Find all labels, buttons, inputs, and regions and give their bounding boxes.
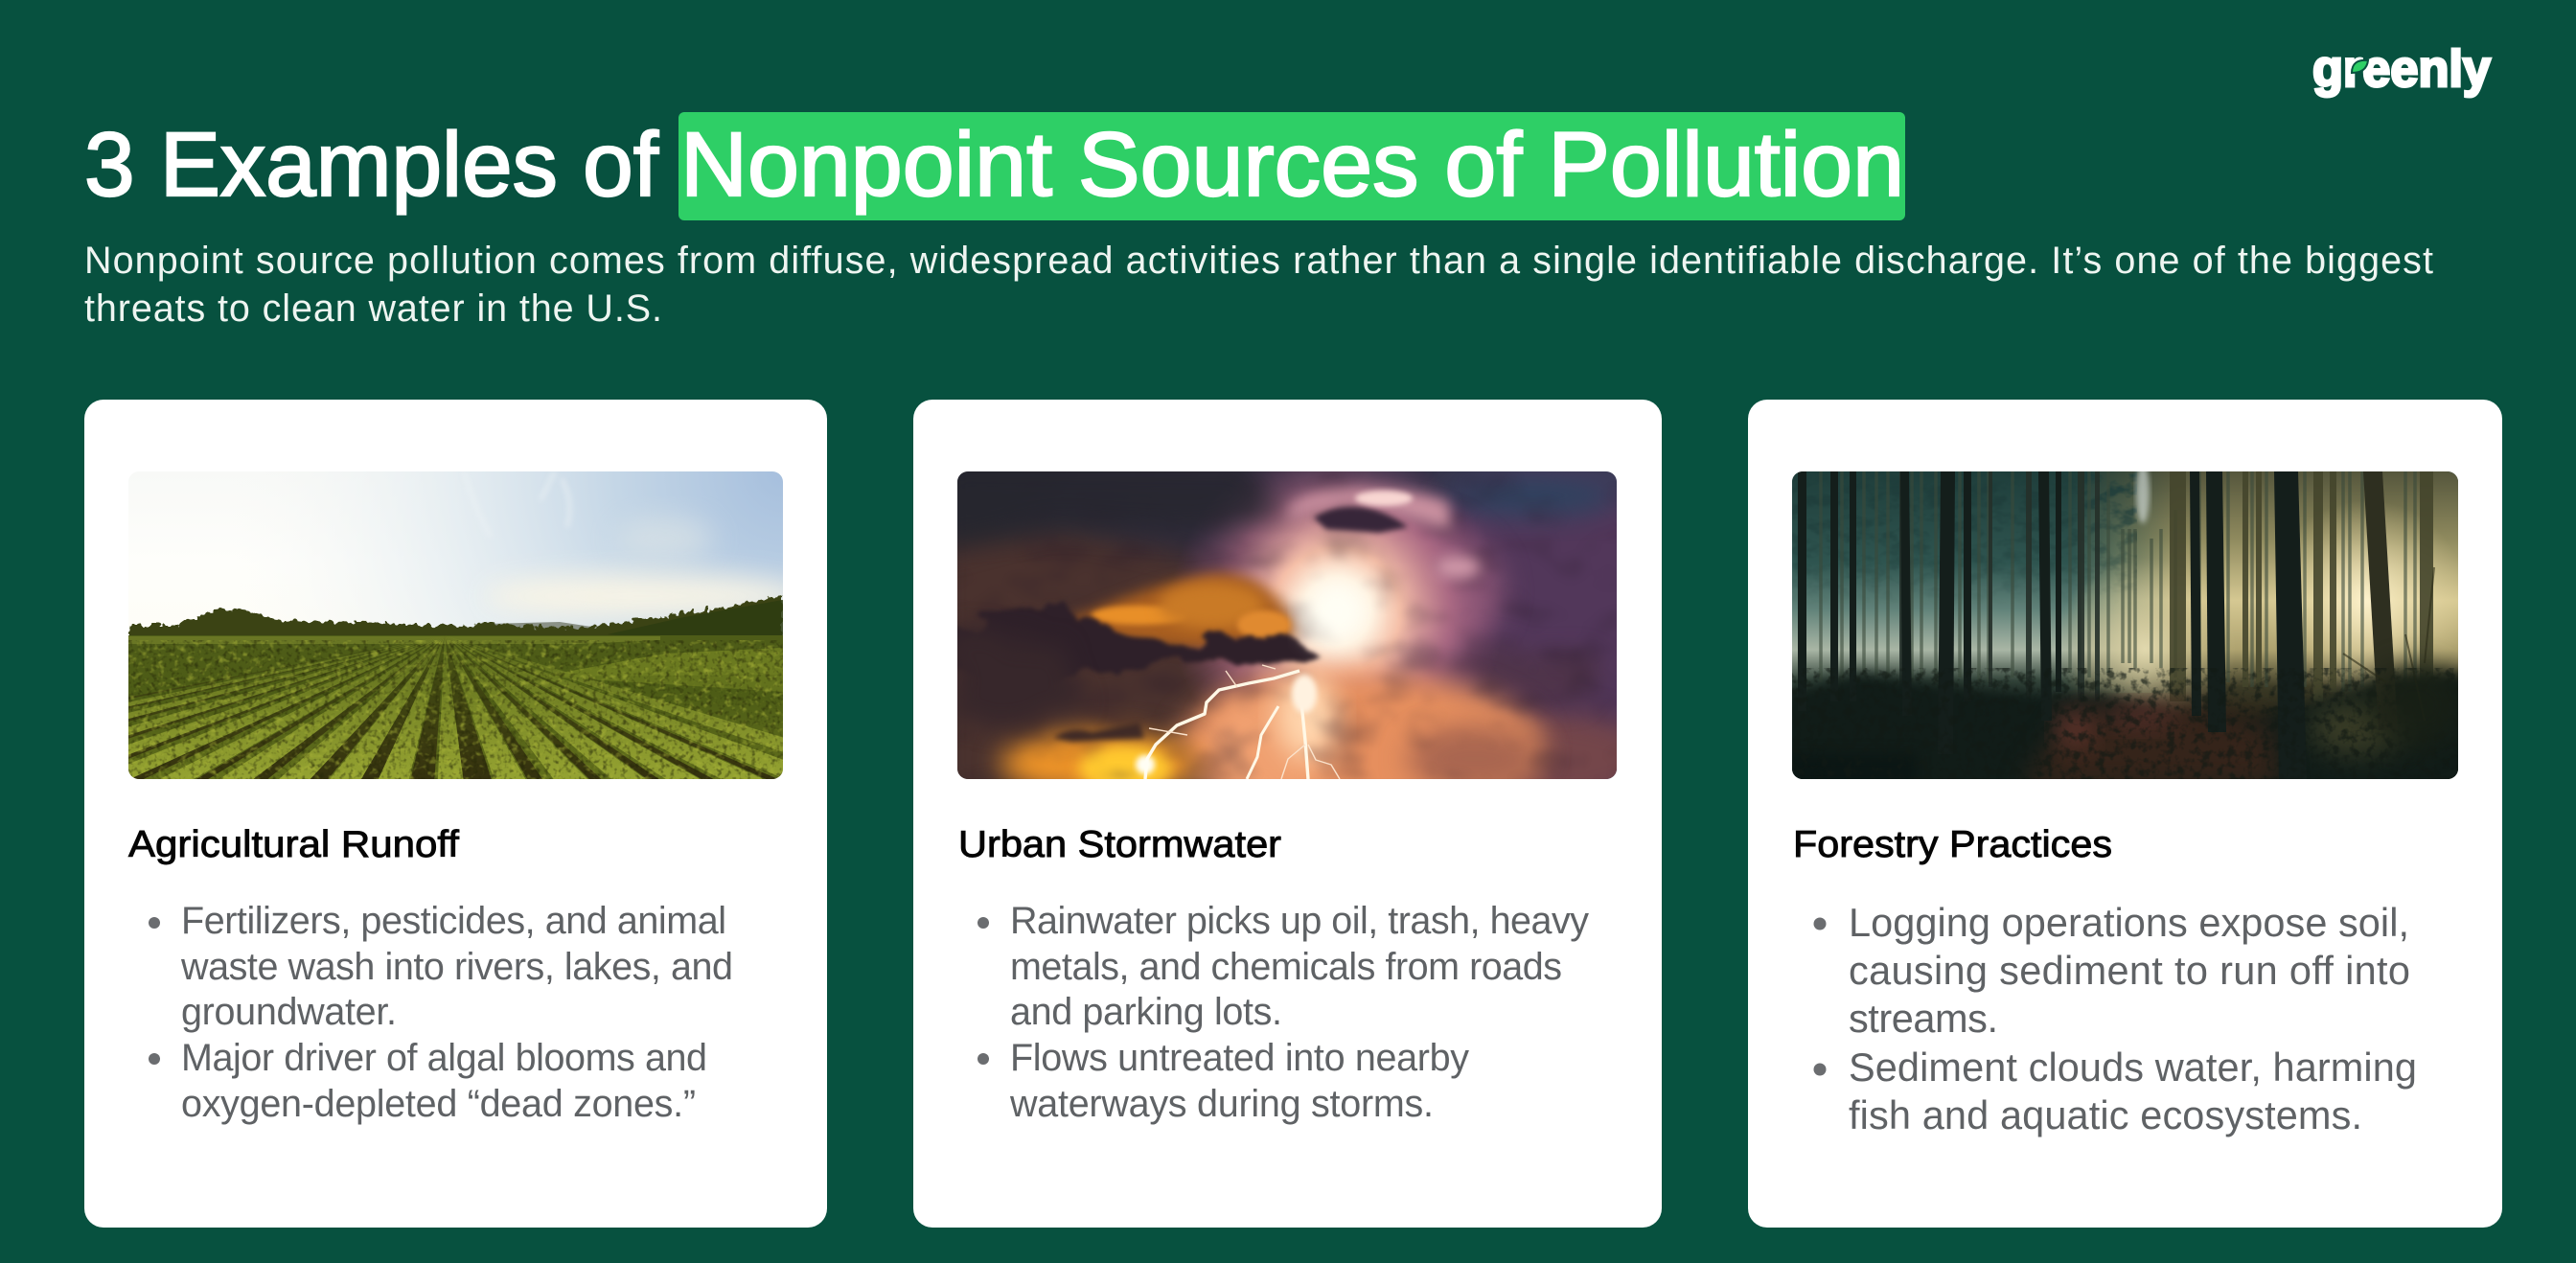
distant trunks	[1821, 471, 2415, 692]
bullet list: causing sediment to run off into	[1849, 948, 2410, 993]
heading: Forestry Practices: Forestry Practices	[1793, 824, 2112, 865]
bullet list	[978, 900, 1589, 1125]
photo: lightning storm	[957, 471, 1617, 779]
bullet list: Sediment clouds water, harming	[1849, 1045, 2417, 1090]
subtitle: Nonpoint source pollution comes from diffuse, widespread activities rather than a single identifiable discharge. It’s one of the biggest	[84, 240, 2433, 282]
heading: Agricultural Runoff: Agricultural Runoff	[128, 824, 459, 865]
bullet list: Fertilizers, pesticides, and animal	[181, 900, 726, 942]
bullet list: waste wash into rivers, lakes, and	[180, 946, 733, 988]
subtitle	[84, 240, 2433, 330]
title: Nonpoint Sources of Pollution	[680, 114, 1904, 216]
bullet list: and parking lots.	[1010, 991, 1282, 1033]
bullet list: Flows untreated into nearby	[1010, 1037, 1469, 1079]
bullet list: streams.	[1849, 996, 1998, 1041]
bullet list	[1813, 900, 2417, 1137]
photo: farm field	[128, 471, 783, 779]
title: 3 Examples of	[84, 114, 659, 216]
bullet list: groundwater.	[181, 991, 397, 1033]
main trunks	[1798, 471, 2307, 779]
panel: agricultural runoff	[84, 400, 827, 1228]
subtitle: threats to clean water in the U.S.	[84, 287, 662, 330]
bullet list: Logging operations expose soil,	[1849, 900, 2409, 945]
bullet list: oxygen-depleted “dead zones.”	[181, 1083, 696, 1125]
bullet list: fish and aquatic ecosystems.	[1849, 1092, 2362, 1137]
bullet list: Major driver of algal blooms and	[181, 1037, 707, 1079]
title	[84, 112, 1905, 220]
bullet list: metals, and chemicals from roads	[1010, 946, 1562, 988]
bullet list: waterways during storms.	[1009, 1083, 1434, 1125]
heading: Urban Stormwater: Urban Stormwater	[958, 824, 1281, 865]
bullet list	[149, 900, 733, 1125]
panel: forestry practices	[1748, 400, 2502, 1228]
logo: greenly: greenly	[2312, 40, 2491, 98]
photo: misty forest	[1792, 471, 2458, 779]
undergrowth	[1792, 664, 2458, 779]
panel: urban stormwater	[913, 400, 1686, 1228]
bullet list: Rainwater picks up oil, trash, heavy	[1010, 900, 1589, 942]
